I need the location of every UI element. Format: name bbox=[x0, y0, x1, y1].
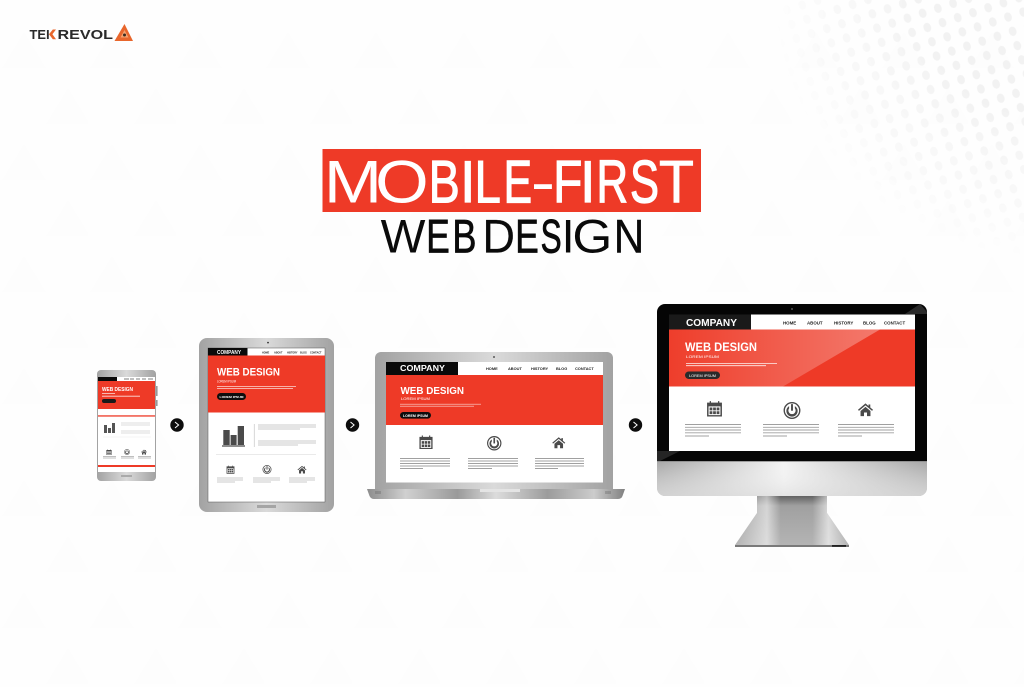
monitor screen: COMPANY bbox=[686, 318, 737, 329]
monitor screen: BLOG bbox=[863, 320, 876, 326]
title line 1: E bbox=[504, 147, 532, 215]
infographic canvas bbox=[30, 0, 1024, 547]
device: tablet: HOME bbox=[262, 352, 270, 354]
arrow: tablet to laptop bbox=[346, 418, 359, 432]
logo: Tekrevol bbox=[30, 24, 133, 42]
device: laptop: BLOG bbox=[556, 366, 567, 371]
title line 2: W bbox=[381, 210, 426, 262]
title line 2: E bbox=[515, 210, 539, 262]
device: laptop: CONTACT bbox=[575, 366, 594, 371]
title line 1: L bbox=[474, 147, 501, 215]
monitor screen: ABOUT bbox=[807, 320, 823, 326]
device: laptop: LOREM IPSUM bbox=[401, 397, 430, 401]
device: laptop: LOREM IPSUM bbox=[403, 414, 428, 418]
device: tablet: ABOUT bbox=[274, 352, 283, 354]
title line 2: N bbox=[614, 210, 644, 262]
monitor screen: HOME bbox=[783, 320, 796, 326]
monitor hero: WEB DESIGN bbox=[685, 340, 757, 354]
title line 1: F bbox=[553, 147, 582, 215]
title line 1: I bbox=[459, 147, 476, 215]
device: tablet: CONTACT bbox=[310, 352, 322, 354]
monitor bezel bbox=[657, 304, 927, 461]
title line 2: D bbox=[482, 210, 515, 262]
title line 2: E bbox=[426, 210, 450, 262]
monitor text columns bbox=[685, 424, 894, 436]
device: phone: WEB DESIGN bbox=[102, 387, 133, 393]
title line 1: - bbox=[531, 147, 555, 215]
arrow: phone to tablet bbox=[170, 418, 184, 432]
device: phone bbox=[97, 370, 158, 481]
title line 1: R bbox=[596, 147, 628, 215]
title line 1: S bbox=[630, 147, 659, 215]
title line 2: B bbox=[452, 210, 476, 262]
device: tablet: WEB DESIGN bbox=[217, 367, 280, 379]
laptop base bbox=[367, 489, 625, 499]
title bbox=[322, 147, 701, 262]
device: laptop: COMPANY bbox=[400, 363, 445, 373]
title line 2: G bbox=[572, 210, 612, 262]
monitor screen: CONTACT bbox=[884, 320, 905, 326]
title line 1 banner bbox=[322, 149, 701, 212]
title line 2: I bbox=[562, 210, 575, 262]
title line 2: S bbox=[541, 210, 562, 262]
device: laptop: ABOUT bbox=[508, 366, 522, 371]
device: tablet: HISTORY bbox=[287, 352, 298, 354]
device: tablet: LOREM IPSUM bbox=[220, 395, 244, 399]
monitor hero: LOREM IPSUM bbox=[686, 354, 719, 359]
tablet bar chart bbox=[222, 426, 245, 447]
device: tablet: BLOG bbox=[300, 352, 307, 354]
device: tablet bbox=[199, 338, 334, 512]
logo: Tekrevol: K bbox=[46, 27, 57, 42]
monitor hero bbox=[669, 330, 915, 386]
title line 1: M bbox=[324, 147, 382, 215]
title line 1: O bbox=[375, 147, 429, 215]
logo: Tekrevol: REVOL bbox=[58, 27, 113, 42]
device: laptop bbox=[367, 352, 625, 499]
title line 1: I bbox=[579, 147, 596, 215]
title line 1: B bbox=[429, 147, 460, 215]
device: laptop: HISTORY bbox=[531, 366, 548, 371]
device: laptop: HOME bbox=[486, 366, 498, 371]
arrow: laptop to desktop bbox=[629, 418, 642, 432]
device: desktop monitor bbox=[657, 304, 927, 547]
device: laptop: WEB DESIGN bbox=[400, 385, 464, 397]
logo: Tekrevol: TE bbox=[30, 27, 46, 42]
monitor icons bbox=[707, 401, 873, 418]
device: tablet: LOREM IPSUM bbox=[217, 380, 236, 384]
monitor screen: HISTORY bbox=[834, 320, 853, 326]
monitor hero: LOREM IPSUM bbox=[689, 374, 716, 378]
title line 1: T bbox=[659, 147, 694, 215]
monitor stand bbox=[735, 496, 849, 547]
monitor screen bbox=[669, 314, 915, 451]
monitor chin bbox=[657, 461, 927, 496]
device: tablet: COMPANY bbox=[217, 350, 242, 356]
